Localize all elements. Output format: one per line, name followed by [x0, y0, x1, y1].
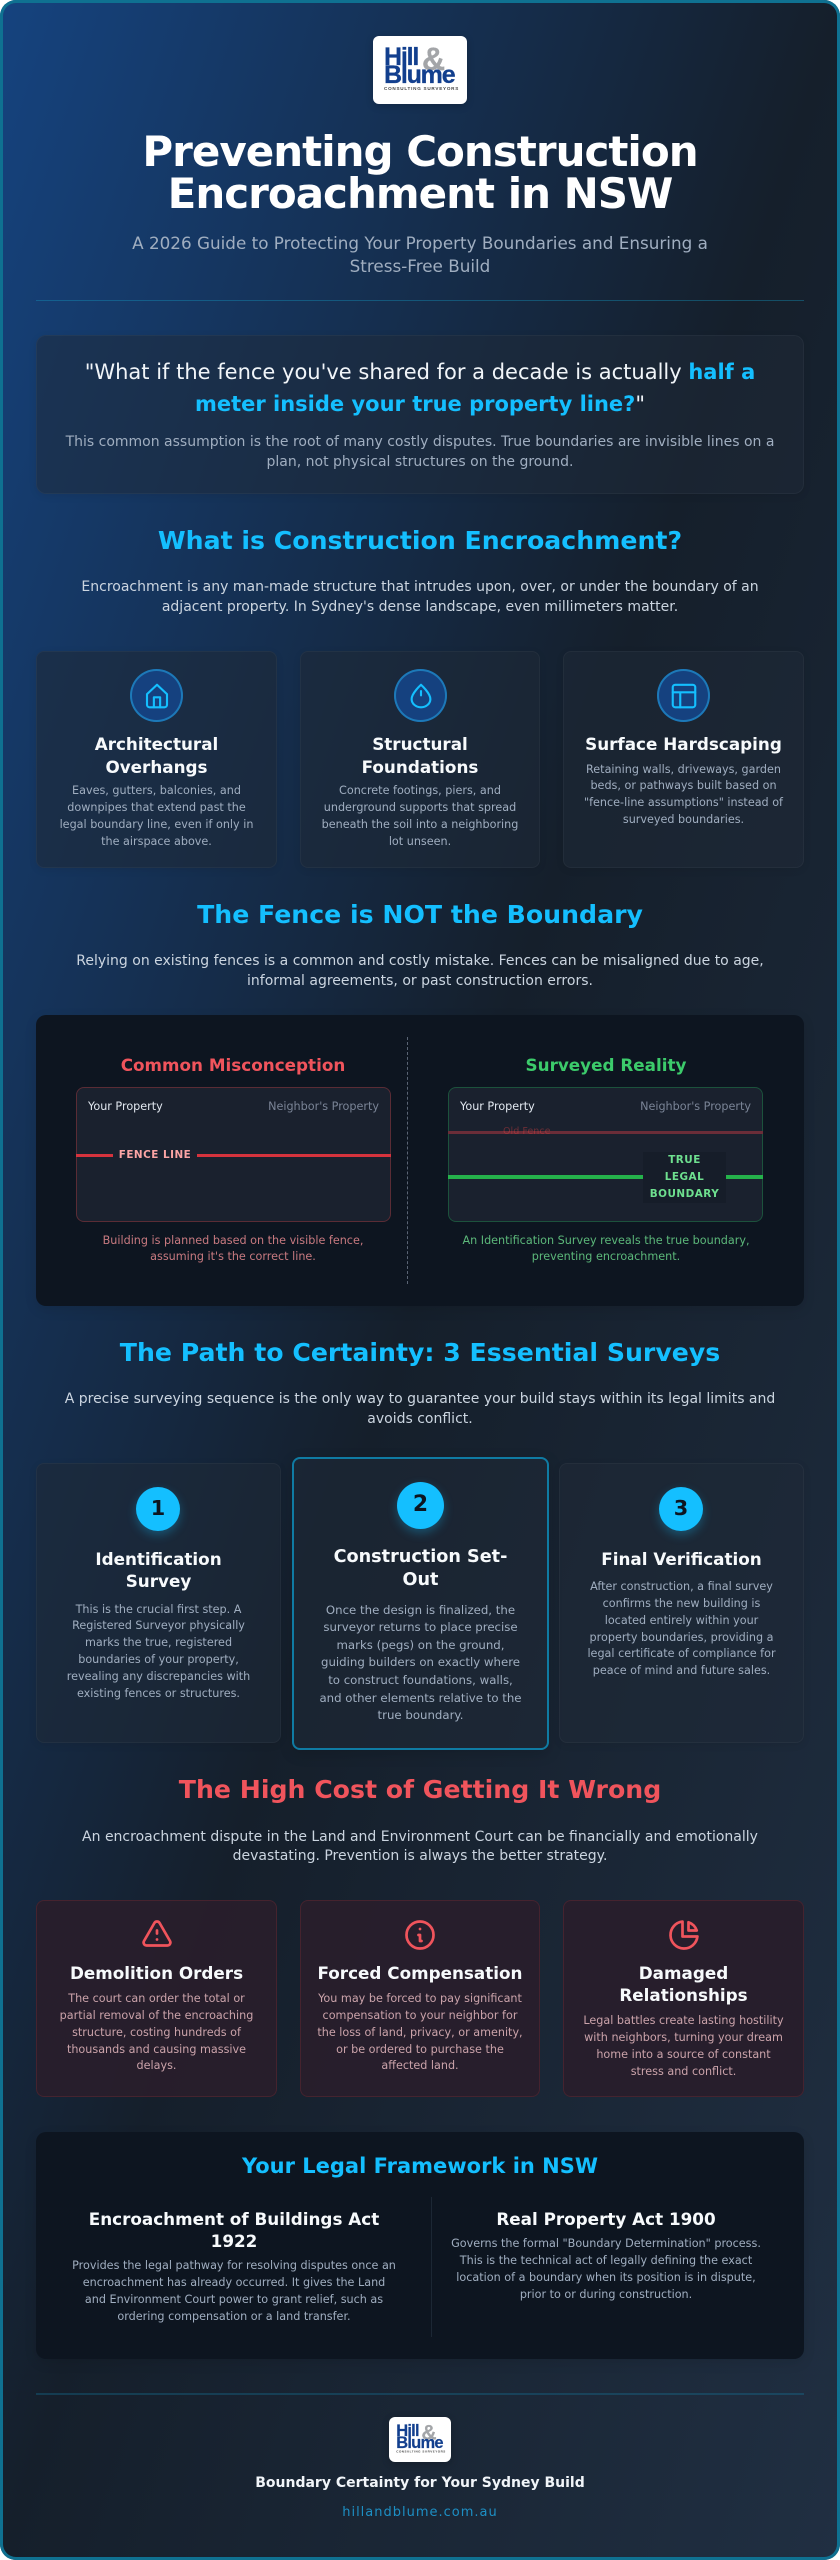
footer tagline: Boundary Certainty for Your Sydney Build [255, 2475, 585, 2491]
text: survey sequence: avoids conflict. [367, 1411, 473, 1427]
text: survey sequence: A precise surveying sequence is the only way to guarantee your build stays within its legal limits and [65, 1391, 775, 1407]
card title [362, 734, 478, 776]
caption: misconception: assuming it's the correct line. [150, 1250, 316, 1263]
panel: demolition orders [36, 1900, 277, 2097]
card text: underground supports that spread [324, 801, 516, 814]
heading: what is encroachment: What is Construction Encroachment? [158, 526, 682, 555]
step text: Registered Surveyor physically [72, 1619, 245, 1632]
act text: prior to or during construction. [520, 2288, 692, 2301]
quote text [85, 360, 755, 416]
logo: header: Hill [384, 43, 418, 71]
step number 3 [659, 1487, 703, 1531]
card text: lot unseen. [389, 835, 451, 848]
panel: damaged relationships [563, 1900, 804, 2097]
step text: marks (pegs) on the ground, [336, 1638, 504, 1652]
step text: After construction, a final survey [590, 1580, 773, 1593]
card text: You may be forced to pay significant [318, 1992, 522, 2005]
card text: Retaining walls, driveways, garden [586, 763, 781, 776]
caption: reality [462, 1234, 750, 1263]
label: neighbor's property: Neighbor's Property [268, 1100, 379, 1113]
step text: confirms the new building is [603, 1597, 760, 1610]
heading: path to certainty: The Path to Certainty: 3 Essential Surveys [120, 1338, 720, 1367]
act text [451, 2237, 761, 2301]
panel: forced compensation [300, 1900, 540, 2097]
card title: Foundations [362, 756, 478, 776]
card text: the airspace above. [101, 835, 212, 848]
label: true legal boundary: BOUNDARY [650, 1188, 719, 1200]
act title: 1922 [211, 2231, 257, 2251]
label: true legal boundary: TRUE [668, 1154, 701, 1166]
text: encroachment definition: Encroachment is any man-made structure that intrudes upon, over, or under the boundary of an [81, 579, 759, 595]
act text: Provides the legal pathway for resolving disputes once an [72, 2259, 396, 2272]
step text: Once the design is finalized, the [326, 1602, 515, 1616]
step text: and other elements relative to the [319, 1691, 522, 1705]
panel: fence comparison diagram [36, 1015, 804, 1306]
step title [334, 1547, 507, 1590]
card title: Structural [372, 734, 468, 754]
heading: high cost: The High Cost of Getting It Wrong [179, 1774, 661, 1804]
step text: revealing any discrepancies with [67, 1670, 250, 1683]
card title: Damaged [639, 1963, 728, 1983]
panel: opening quote [36, 335, 804, 494]
step title: Out [403, 1570, 438, 1590]
act title [89, 2209, 379, 2251]
logo: header [373, 36, 467, 104]
panel: identification survey [36, 1463, 281, 1743]
logo: footer: & [421, 2420, 437, 2444]
card text: thousands and causing massive [67, 2043, 246, 2056]
step number 2: 2 [413, 1492, 428, 1516]
label: your property: Your Property [460, 1100, 535, 1113]
card text: structure, costing hundreds of [72, 2026, 241, 2039]
title: Encroachment in NSW [168, 169, 672, 218]
card text: home into a source of constant [596, 2048, 771, 2061]
caption: reality: An Identification Survey reveals the true boundary, [462, 1234, 750, 1246]
card text: compensation to your neighbor for [323, 2009, 517, 2022]
act text: and Environment Court power to grant relief, such as [85, 2293, 383, 2306]
logo: footer: Hill [396, 2422, 419, 2440]
card text: The court can order the total or [68, 1992, 245, 2005]
logo: footer: Blume [396, 2434, 443, 2452]
card text: partial removal of the encroaching [60, 2009, 253, 2022]
text: encroachment definition [81, 579, 759, 615]
step title: Construction Set- [334, 1547, 507, 1567]
act text: Governs the formal "Boundary Determination" process. [451, 2237, 761, 2250]
label: true legal boundary [643, 1152, 726, 1203]
step text [587, 1580, 776, 1677]
card text [322, 784, 518, 848]
logo: header: & [422, 41, 445, 77]
diagram: true boundary [448, 1087, 763, 1222]
subtitle [132, 233, 708, 276]
card text [317, 1992, 523, 2072]
subtitle: A 2026 Guide to Protecting Your Property Boundaries and Ensuring a [132, 233, 708, 253]
heading: fence is not the boundary: The Fence is NOT the Boundary [197, 900, 643, 929]
card title [619, 1963, 748, 2005]
label: true legal boundary: LEGAL [665, 1171, 704, 1183]
act: real property [451, 2209, 761, 2301]
panel: final verification [559, 1463, 804, 1743]
quote text: meter inside your true property line?" [195, 392, 645, 416]
step number 1: 1 [151, 1496, 165, 1520]
step text: peace of mind and future sales. [593, 1664, 770, 1677]
step text: surveyor returns to place precise [323, 1620, 518, 1634]
card text [583, 2014, 784, 2078]
act: encroachment of buildings [72, 2209, 396, 2323]
card text: surveyed boundaries. [623, 813, 744, 826]
card title: Architectural [95, 734, 218, 754]
quote explanation: This common assumption is the root of many costly disputes. True boundaries are invisible lines on a [66, 434, 774, 450]
label: neighbor's property: Neighbor's Property [640, 1100, 751, 1113]
card text: beneath the soil into a neighboring [322, 818, 518, 831]
card text [60, 1992, 253, 2072]
card text: or be ordered to purchase the [336, 2043, 504, 2056]
card text: Eaves, gutters, balconies, and [72, 784, 241, 797]
logo: header: Blume [384, 61, 454, 89]
card text: delays. [137, 2059, 176, 2072]
act title: Encroachment of Buildings Act [89, 2209, 379, 2229]
card text: downpipes that extend past the [67, 801, 246, 814]
caption: misconception: Building is planned based on the visible fence, [103, 1234, 363, 1246]
text: fence explanation: informal agreements, or past construction errors. [247, 973, 593, 989]
footer website: hillandblume.com.au [342, 2505, 498, 2520]
subtitle: Stress-Free Build [350, 256, 490, 276]
card title: Demolition Orders [70, 1963, 243, 1983]
step number 1 [136, 1487, 180, 1531]
card title: Surface Hardscaping [585, 734, 782, 754]
quote text: "What if the fence you've shared for a decade is actually half a [85, 360, 755, 384]
card title: Relationships [619, 1985, 748, 2005]
card text: Concrete footings, piers, and [339, 784, 501, 797]
title: Preventing Construction [142, 127, 698, 176]
act text [72, 2259, 396, 2323]
step text: guiding builders on exactly where [321, 1655, 520, 1669]
text: encroachment definition: adjacent property. In Sydney's dense landscape, even millimeters matter. [162, 599, 678, 615]
card text: beds, or pathways built based on [590, 779, 777, 792]
card text: "fence-line assumptions" instead of [584, 796, 783, 809]
text: survey sequence [64, 1391, 775, 1427]
panel: structural foundations [300, 651, 540, 868]
panel: architectural overhangs [36, 651, 277, 868]
card text [584, 763, 784, 826]
text: cost explanation: An encroachment dispute in the Land and Environment Court can be financially and emotionally [82, 1828, 758, 1844]
label: old fence: Old Fence [503, 1126, 551, 1137]
text: fence explanation [76, 953, 764, 989]
label: fence line: FENCE LINE [119, 1149, 191, 1161]
logo: header: CONSULTING SURVEYORS [384, 86, 459, 91]
step text [67, 1603, 250, 1700]
step text [319, 1602, 522, 1722]
step text: boundaries of your property, [78, 1653, 239, 1666]
title [142, 127, 698, 218]
step title: Survey [126, 1571, 191, 1591]
step text: marks the true, registered [85, 1636, 232, 1649]
label: fence line [113, 1145, 197, 1165]
caption: reality: preventing encroachment. [532, 1250, 680, 1263]
text: fence explanation: Relying on existing fences is a common and costly mistake. Fences can be misaligned due to age, [76, 953, 764, 969]
icon: warning triangle [142, 1920, 172, 1947]
label: your property: Your Property [88, 1100, 163, 1113]
card text: with neighbors, turning your dream [584, 2031, 783, 2044]
panel: legal framework [36, 2132, 804, 2359]
text: cost explanation [82, 1828, 758, 1864]
heading: surveyed reality: Surveyed Reality [526, 1055, 686, 1075]
act text: location of a boundary when its position is in dispute, [456, 2271, 756, 2284]
heading: common misconception: Common Misconception [121, 1055, 345, 1075]
panel: surface hardscaping [563, 651, 804, 868]
caption: misconception [103, 1234, 363, 1263]
icon: info circle [405, 1920, 435, 1950]
icon: drop [394, 669, 447, 722]
act text: ordering compensation or a land transfer. [117, 2310, 351, 2323]
logo: footer: CONSULTING SURVEYORS [396, 2450, 446, 2453]
logo: footer [389, 2417, 451, 2462]
heading: legal framework: Your Legal Framework in NSW [242, 2154, 598, 2178]
card title: Overhangs [105, 756, 208, 776]
act text: This is the technical act of legally defining the exact [460, 2254, 752, 2267]
card text: stress and conflict. [631, 2065, 736, 2078]
step text: legal certificate of compliance for [587, 1647, 776, 1660]
card text: legal boundary line, even if only in [60, 818, 253, 831]
act text: encroachment has already occurred. It gives the Land [83, 2276, 385, 2289]
step text: existing fences or structures. [77, 1687, 240, 1700]
step text: This is the crucial first step. A [76, 1603, 241, 1616]
step text: located entirely within your [605, 1614, 758, 1627]
step number 2 [397, 1482, 444, 1528]
step text: property boundaries, providing a [590, 1631, 773, 1644]
step title [95, 1549, 222, 1591]
act title: Real Property Act 1900 [496, 2209, 716, 2229]
step title: Identification [95, 1549, 222, 1569]
card text: affected land. [381, 2059, 459, 2072]
icon: house [130, 669, 183, 722]
card title [94, 734, 218, 776]
card text: the loss of land, privacy, or amenity, [317, 2026, 523, 2039]
text: cost explanation: devastating. Prevention is always the better strategy. [233, 1848, 607, 1864]
step number 3: 3 [674, 1496, 688, 1520]
quote explanation: plan, not physical structures on the ground. [267, 454, 573, 470]
card title: Forced Compensation [317, 1963, 522, 1983]
step title: Final Verification [601, 1549, 762, 1569]
step text: true boundary. [378, 1708, 463, 1722]
card text [60, 784, 253, 848]
diagram: fence line [76, 1087, 391, 1222]
icon: pie chart [669, 1920, 699, 1950]
icon: layout [657, 669, 710, 722]
panel: construction set-out [292, 1457, 549, 1750]
step text: to construct foundations, walls, [328, 1673, 513, 1687]
card text: Legal battles create lasting hostility [583, 2014, 784, 2027]
quote explanation [66, 434, 774, 470]
